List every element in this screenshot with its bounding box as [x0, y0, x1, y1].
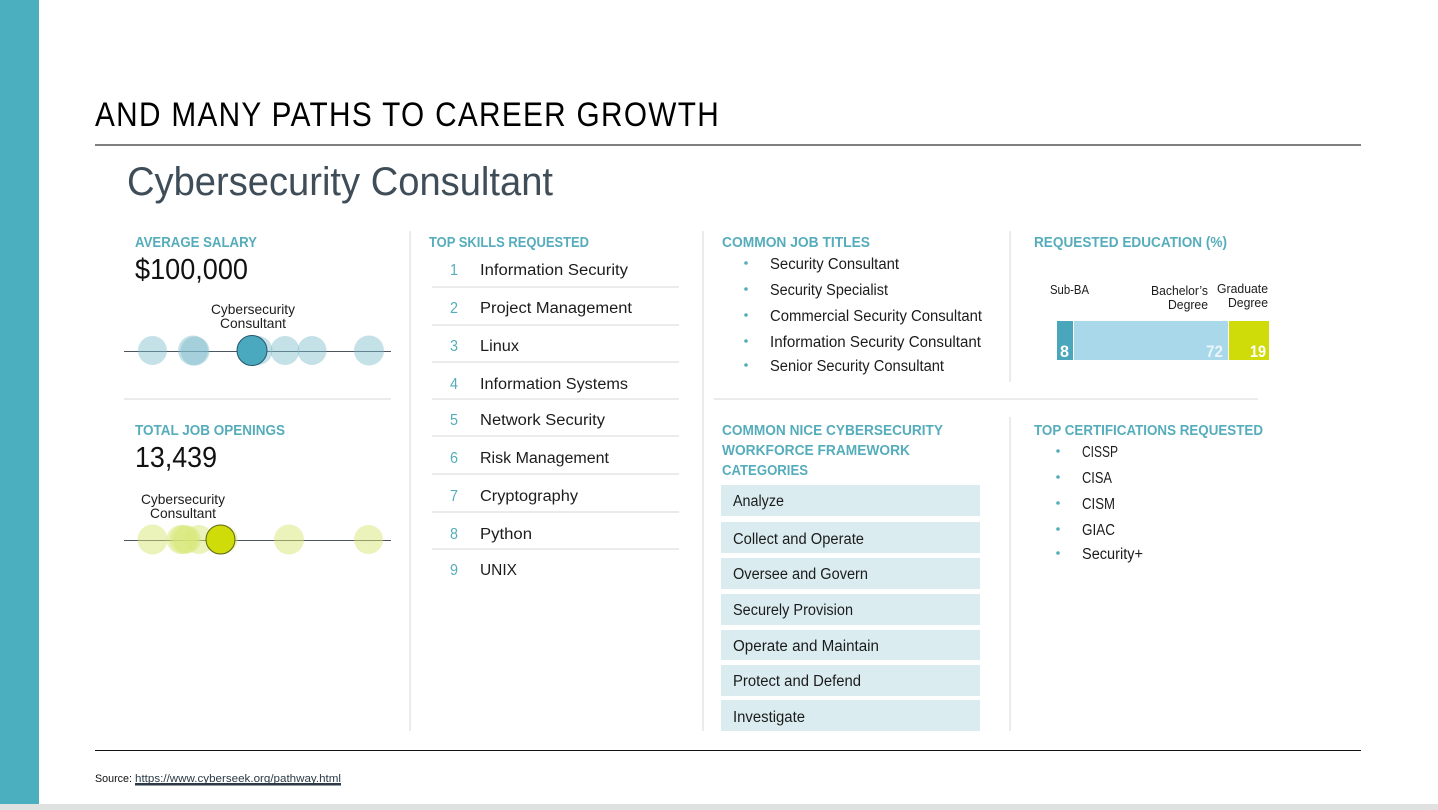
- heading: common job titles: COMMON JOB TITLES: [722, 235, 870, 251]
- skills list: Information Systems: [480, 376, 628, 393]
- heading: average salary: AVERAGE SALARY: [135, 235, 257, 251]
- skills list: 2: [450, 300, 458, 317]
- heading: top skills requested: TOP SKILLS REQUESTED: [429, 235, 589, 251]
- openings value: 13,439: [135, 442, 217, 474]
- job titles list: Commercial Security Consultant: [770, 308, 983, 325]
- category: Analyze: [721, 485, 980, 516]
- salary marker label: Cybersecurity: [211, 301, 295, 317]
- category: Collect and Operate: [721, 522, 980, 553]
- skills list: [450, 262, 633, 579]
- openings marker label: Cybersecurity: [141, 491, 225, 507]
- heading: total job openings: TOTAL JOB OPENINGS: [135, 423, 285, 439]
- footer band: [0, 804, 1438, 810]
- panel: average salary: [124, 235, 391, 366]
- heading: top certifications requested: TOP CERTIFICATIONS REQUESTED: [1034, 423, 1263, 439]
- skills list: Network Security: [480, 412, 605, 429]
- category: Securely Provision: [721, 594, 980, 625]
- skills list: 3: [450, 338, 458, 355]
- panel: top skills: [429, 235, 679, 579]
- panel: top certifications: [1034, 423, 1263, 563]
- job titles list: [744, 256, 983, 375]
- category: Oversee and Govern: [721, 558, 980, 589]
- certifications list: CISM: [1082, 496, 1115, 513]
- category: Investigate: Investigate: [733, 709, 805, 726]
- skills list: Linux: [480, 338, 519, 355]
- salary dot plot: [124, 336, 391, 366]
- education bar labels: [1050, 282, 1268, 312]
- certifications list: GIAC: [1082, 522, 1115, 539]
- source line: https://www.cyberseek.org/pathway.html: [135, 773, 341, 785]
- certifications list: CISSP: [1082, 444, 1118, 461]
- salary marker label: [211, 301, 295, 331]
- left accent bar: [0, 0, 39, 804]
- skills list: Cryptography: [480, 488, 578, 505]
- skills list: 6: [450, 450, 458, 467]
- panel: requested education: [1034, 235, 1269, 361]
- education bar labels: Bachelor’s: [1151, 284, 1208, 298]
- skills list: Information Security: [480, 262, 628, 279]
- education bar labels: Graduate: [1217, 282, 1268, 296]
- panel: NICE framework categories: [721, 423, 980, 731]
- category: Oversee and Govern: Oversee and Govern: [733, 566, 868, 583]
- category: Operate and Maintain: Operate and Maintain: [733, 638, 879, 655]
- heading: NICE framework categories: [722, 423, 943, 479]
- skills list: Project Management: [480, 300, 633, 317]
- skills list: 1: [450, 262, 458, 279]
- job titles list: Security Specialist: [770, 282, 889, 299]
- education stacked bar: 72: [1206, 342, 1223, 361]
- source line: Source:: [95, 773, 132, 785]
- skills list: 9: [450, 562, 458, 579]
- certifications list: CISA: [1082, 470, 1113, 487]
- category: Securely Provision: Securely Provision: [733, 602, 853, 619]
- job titles list: Security Consultant: [770, 256, 900, 273]
- certifications list: [1056, 444, 1143, 563]
- category: Collect and Operate: Collect and Operate: [733, 531, 864, 548]
- salary value: $100,000: [135, 254, 248, 286]
- openings marker label: Consultant: [150, 505, 216, 521]
- education bar labels: Degree: [1168, 298, 1208, 312]
- job titles list: Information Security Consultant: [770, 334, 982, 351]
- category: Protect and Defend: Protect and Defend: [733, 673, 861, 690]
- skills list: 8: [450, 526, 458, 543]
- skills list: UNIX: [480, 562, 518, 579]
- openings dot plot: [124, 524, 391, 554]
- skills list: Risk Management: [480, 450, 610, 467]
- heading: NICE framework categories: WORKFORCE FRAMEWORK: [722, 443, 910, 459]
- category: Analyze: Analyze: [733, 493, 784, 510]
- education bar labels: Degree: [1228, 296, 1268, 310]
- panel: common job titles: [722, 235, 983, 375]
- heading: job role: Cybersecurity Consultant: [127, 160, 553, 204]
- job titles list: Senior Security Consultant: [770, 358, 945, 375]
- salary marker label: Consultant: [220, 315, 286, 331]
- heading: requested education: REQUESTED EDUCATION (%): [1034, 235, 1227, 251]
- skills list: 5: [450, 412, 458, 429]
- certifications list: Security+: [1082, 546, 1143, 563]
- skills list: 7: [450, 488, 458, 505]
- skills list: 4: [450, 376, 458, 393]
- education stacked bar: 19: [1250, 342, 1266, 361]
- panel: total job openings: [124, 423, 391, 554]
- heading: NICE framework categories: COMMON NICE CYBERSECURITY: [722, 423, 943, 439]
- category: Protect and Defend: [721, 665, 980, 696]
- openings marker label: [141, 491, 225, 521]
- heading: NICE framework categories: CATEGORIES: [722, 463, 808, 479]
- category: Investigate: [721, 700, 980, 731]
- education stacked bar: [1057, 321, 1269, 361]
- title: AND MANY PATHS TO CAREER GROWTH: [95, 96, 720, 134]
- education bar labels: Sub-BA: [1050, 283, 1090, 297]
- education stacked bar: 8: [1060, 342, 1069, 361]
- skills list: Python: [480, 526, 532, 543]
- category: Operate and Maintain: [721, 630, 980, 660]
